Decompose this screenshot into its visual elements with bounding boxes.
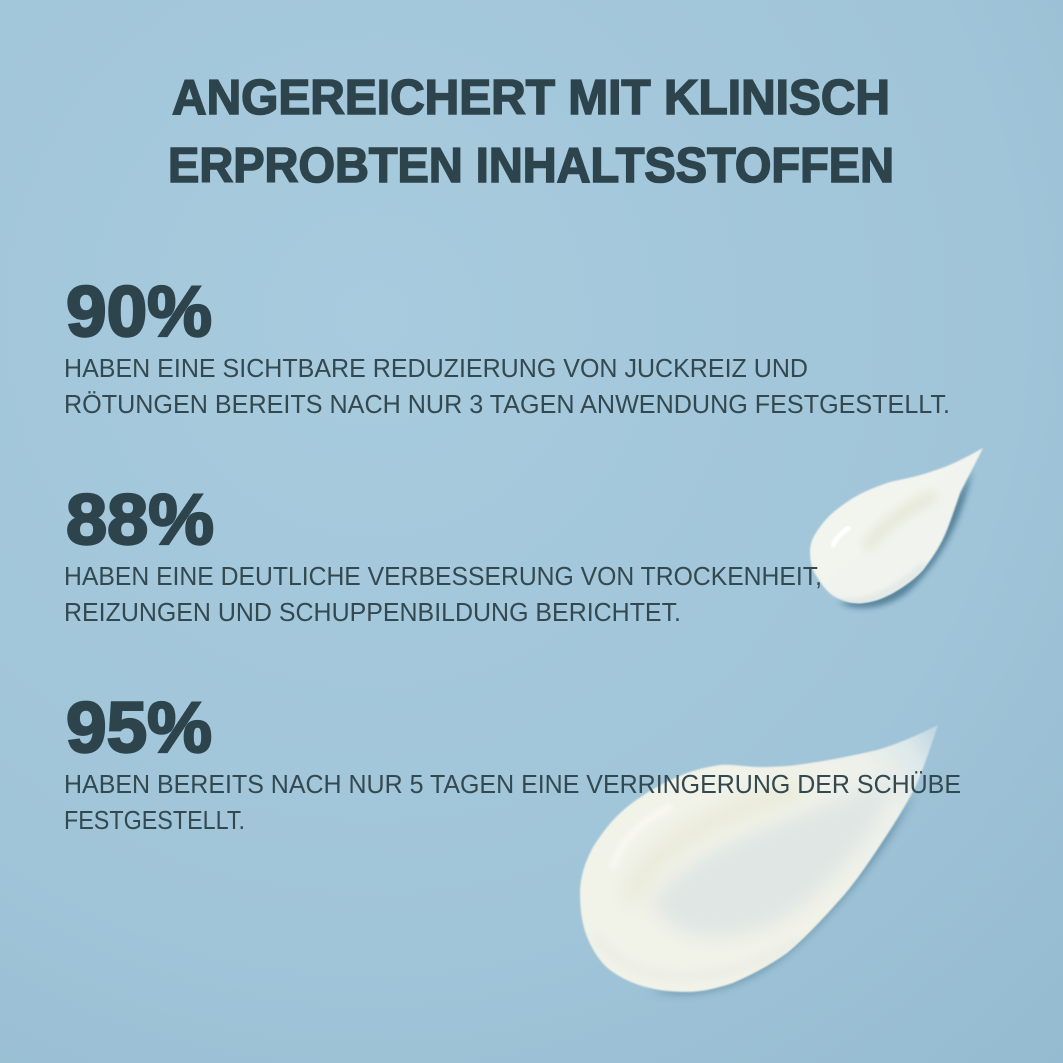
title: ANGEREICHERT MIT KLINISCH xyxy=(172,71,890,125)
description xyxy=(64,771,961,835)
description xyxy=(64,563,822,627)
title: ERPROBTEN INHALTSSTOFFEN xyxy=(168,139,894,193)
description: FESTGESTELLT. xyxy=(64,807,245,835)
cream smear: large swirl xyxy=(580,725,938,992)
description: HABEN BEREITS NACH NUR 5 TAGEN EINE VERRINGERUNG DER SCHÜBE xyxy=(64,771,961,799)
description xyxy=(64,355,950,419)
number: 88% xyxy=(66,481,214,560)
statistic: 90% xyxy=(64,273,950,419)
statistic: 95% xyxy=(64,689,961,835)
statistic: 88% xyxy=(64,481,822,627)
cream smear: small drop xyxy=(810,448,983,608)
description: RÖTUNGEN BEREITS NACH NUR 3 TAGEN ANWENDUNG FESTGESTELLT. xyxy=(64,391,950,419)
number: 95% xyxy=(66,689,212,768)
description: HABEN EINE SICHTBARE REDUZIERUNG VON JUCKREIZ UND xyxy=(64,355,808,383)
number: 90% xyxy=(66,273,212,352)
description: HABEN EINE DEUTLICHE VERBESSERUNG VON TROCKENHEIT, xyxy=(64,563,822,591)
title xyxy=(168,71,894,193)
description: REIZUNGEN UND SCHUPPENBILDUNG BERICHTET. xyxy=(64,599,681,627)
